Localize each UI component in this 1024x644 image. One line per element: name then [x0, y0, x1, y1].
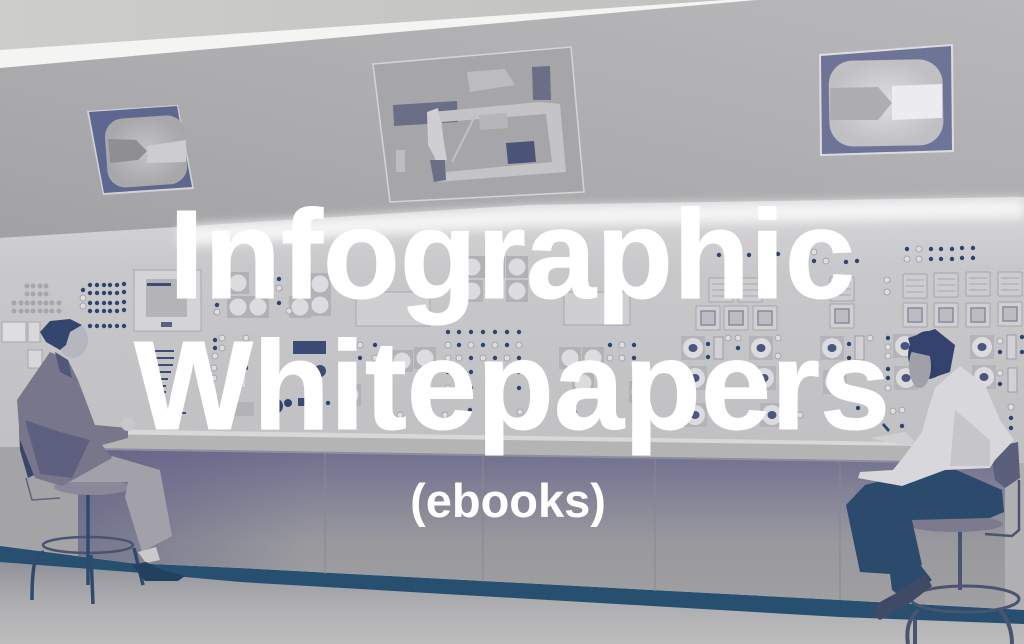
subtitle: (ebooks)	[410, 474, 606, 527]
vertical strip of levers	[152, 350, 186, 414]
left television monitor	[87, 105, 194, 195]
lower left instruments	[211, 335, 330, 416]
left suit jacket	[17, 352, 128, 486]
title line: Whitepapers: Whitepapers	[134, 315, 890, 456]
central schematic board	[373, 47, 584, 202]
left lower wall	[0, 447, 80, 560]
ceiling	[0, 0, 800, 70]
right shoe	[872, 574, 932, 620]
gauge cluster	[214, 272, 331, 318]
right shirt	[858, 366, 1014, 486]
right head	[908, 331, 948, 379]
floor	[0, 560, 1024, 644]
control desk front	[78, 442, 1005, 609]
left stool	[32, 492, 143, 604]
right operator seated	[846, 329, 1020, 644]
right hand and papers	[870, 432, 915, 446]
lit control panel wall	[0, 197, 1024, 560]
square indicator windows	[696, 272, 1022, 330]
left sock	[138, 547, 160, 563]
ceiling light strip	[0, 0, 755, 68]
round selector dials	[681, 334, 1024, 430]
right stool	[907, 530, 1019, 644]
right television monitor	[819, 44, 954, 156]
right lower wall	[1005, 463, 1024, 612]
left head	[58, 322, 88, 358]
right panel upper buttons	[717, 246, 975, 295]
navy button grid	[80, 282, 126, 328]
dark base strip	[0, 546, 1024, 624]
left trousers	[60, 456, 172, 552]
central panel instruments	[339, 256, 651, 418]
control desk top	[95, 429, 920, 462]
chart recorder box	[134, 270, 201, 331]
right trousers	[846, 465, 1004, 574]
left operator seated	[17, 319, 185, 604]
upper wall	[0, 0, 1024, 238]
left knob group	[2, 284, 62, 368]
left shoe	[132, 562, 185, 581]
title line: Infographic: Infographic	[169, 184, 855, 325]
